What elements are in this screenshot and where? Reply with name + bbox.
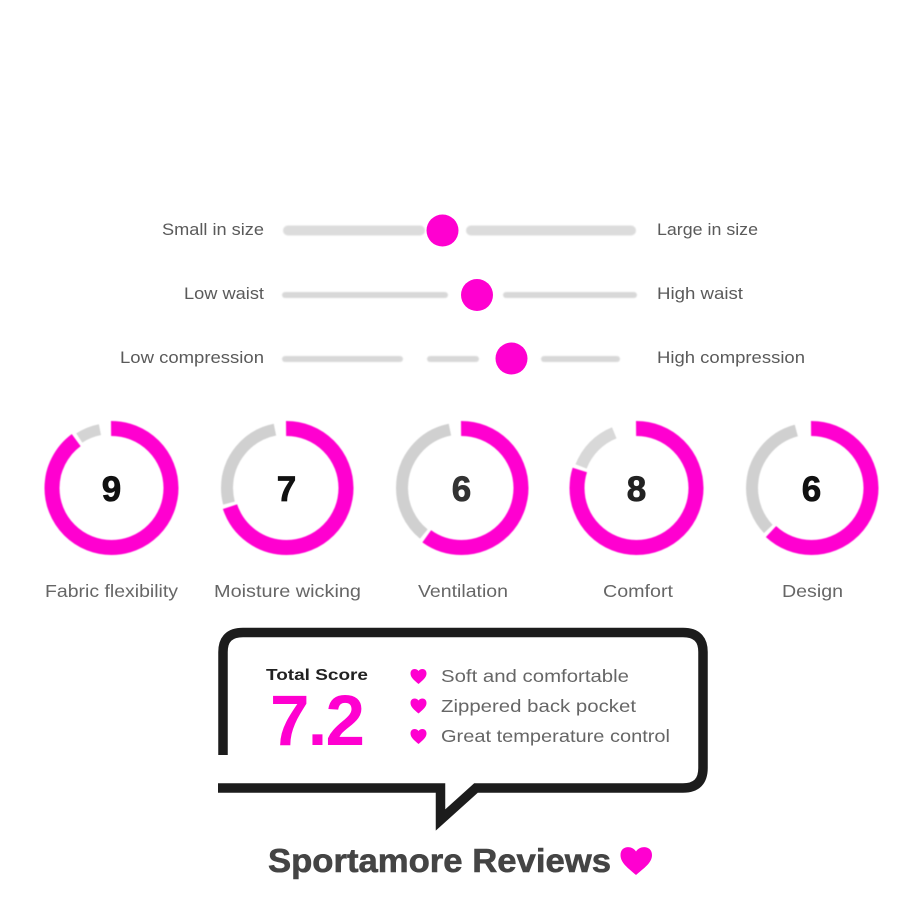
ring: fabric flexibility 9: 9 — [102, 470, 121, 509]
ring: moisture wicking 7 — [214, 428, 361, 601]
ring: comfort 8: 8 — [627, 470, 646, 509]
ring: moisture wicking 7: 7 — [277, 470, 296, 509]
ring: ventilation 6: 6 — [452, 470, 471, 509]
ring: design 6: Design — [782, 581, 843, 601]
ring: fabric flexibility 9: Fabric flexibility — [45, 581, 178, 601]
ring: design 6 — [752, 428, 871, 601]
total score: 7.2 — [270, 682, 365, 761]
icon: heart 2 — [410, 698, 426, 714]
text: zippered back pocket: Zippered back pocket — [441, 696, 636, 716]
ring: comfort 8: Comfort — [603, 581, 673, 601]
speech bubble outline — [218, 632, 703, 820]
slider: size: Large in size — [657, 221, 758, 239]
text: great temperature control: Great temperature control — [441, 726, 670, 746]
slider: compression: Low compression — [120, 349, 264, 367]
slider: size: Small in size — [162, 221, 264, 239]
icon: brand heart — [620, 847, 652, 875]
ring: design 6: 6 — [802, 470, 821, 509]
text: soft and comfortable: Soft and comfortable — [441, 666, 629, 686]
ring: comfort 8 — [577, 428, 696, 601]
icon: heart 3 — [410, 729, 426, 744]
icon: heart 1 — [410, 669, 426, 684]
slider: waist: High waist — [657, 285, 743, 303]
brand name: Sportamore Reviews — [268, 842, 611, 879]
slider: waist: Low waist — [184, 285, 264, 303]
ring: fabric flexibility 9 — [45, 428, 178, 601]
slider: compression — [120, 342, 805, 374]
slider: waist — [184, 279, 743, 311]
total score: Total Score — [266, 667, 368, 684]
pros list — [410, 666, 670, 746]
slider: compression: High compression — [657, 349, 805, 367]
slider: size — [162, 214, 758, 246]
ring: moisture wicking 7: Moisture wicking — [214, 581, 361, 601]
ring: ventilation 6: Ventilation — [418, 581, 508, 601]
ring: ventilation 6 — [402, 428, 521, 601]
